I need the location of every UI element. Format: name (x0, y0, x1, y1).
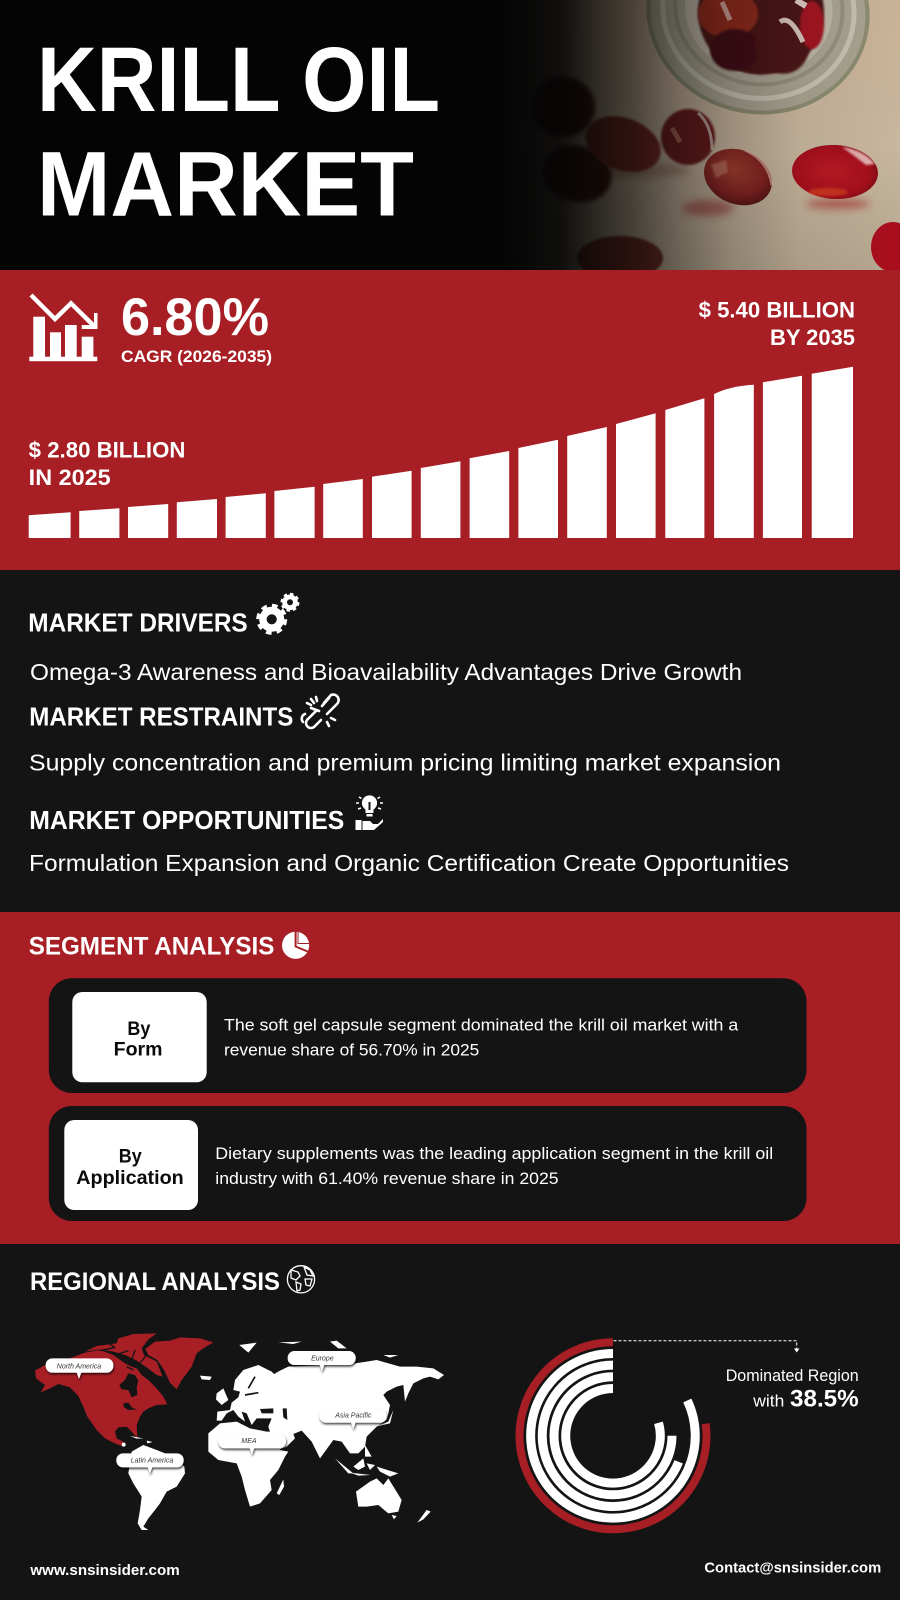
label: by application: Application (76, 1168, 184, 1189)
text: by application finding: Dietary supplements was the leading application segment in the krill oil (215, 1144, 773, 1163)
callout: dominated region share: with (752, 1392, 784, 1411)
CAGR value: 6.80% (121, 288, 269, 347)
label: by form (72, 992, 207, 1082)
text: by application finding: industry with 61.40% revenue share in 2025 (215, 1169, 559, 1188)
text: driver: Omega-3 Awareness and Bioavailability Advantages Drive Growth (30, 659, 742, 685)
panel: header (0, 0, 900, 280)
forecast value (699, 298, 855, 350)
panel: segment analysis (0, 912, 900, 1244)
label: by application (64, 1120, 198, 1210)
icon: lightbulb on hand (356, 795, 383, 830)
base value: IN 2025 (29, 465, 111, 490)
text: by form finding: The soft gel capsule segment dominated the krill oil market with a (224, 1016, 739, 1035)
CAGR label: CAGR (2026-2035) (121, 347, 272, 366)
panel: market size and CAGR (0, 270, 900, 570)
callout: MEA: MEA (241, 1438, 257, 1445)
callout: Europe (288, 1351, 356, 1372)
panel: regional analysis (0, 1244, 900, 1600)
text: opportunity: Formulation Expansion and Organic Certification Create Opportunities (29, 850, 789, 876)
card: by application (49, 1106, 807, 1221)
heading: market restraints: MARKET RESTRAINTS (29, 702, 293, 732)
callout: dominated region share: Dominated Region (726, 1366, 859, 1385)
heading: market drivers: MARKET DRIVERS (28, 608, 248, 638)
title: KRILL OIL (37, 29, 440, 131)
card: by form (49, 978, 807, 1093)
footer: website: www.snsinsider.com (29, 1562, 180, 1579)
callout: Asia Pacific (319, 1409, 387, 1429)
text: restraint: Supply concentration and premium pricing limiting market expansion (29, 750, 781, 776)
bar chart: market growth (29, 367, 853, 538)
heading: regional analysis: REGIONAL ANALYSIS (30, 1268, 280, 1296)
forecast value: BY 2035 (770, 325, 855, 350)
panel: drivers, restraints, opportunities (0, 570, 900, 912)
callout: dominated region share (726, 1366, 859, 1413)
icon: broken chain link (302, 695, 339, 728)
base value: $ 2.80 BILLION (29, 438, 185, 463)
world map (35, 1333, 444, 1530)
label: by form: Form (114, 1040, 162, 1061)
text: by application finding (215, 1144, 773, 1188)
map region: North America highlighted (35, 1333, 213, 1447)
icon: gears (258, 594, 298, 633)
callout: North America: North America (57, 1363, 101, 1370)
icon: globe (287, 1266, 315, 1293)
heading: market opportunities: MARKET OPPORTUNITIES (29, 805, 344, 835)
map region: rest of world (122, 1341, 444, 1530)
forecast value: $ 5.40 BILLION (699, 298, 855, 323)
callout: North America (46, 1358, 113, 1379)
icon: pie chart (282, 931, 310, 959)
callout: Asia Pacific: Asia Pacific (334, 1413, 372, 1420)
label: by form: By (127, 1019, 151, 1040)
callout: Latin America (116, 1453, 184, 1474)
footer: contact email: Contact@snsinsider.com (704, 1560, 881, 1577)
radial bar chart (519, 1342, 706, 1529)
title: MARKET (37, 134, 414, 236)
callout: Europe: Europe (311, 1355, 334, 1362)
base value (29, 438, 185, 490)
icon: chart with trend arrow (29, 295, 97, 361)
callout: Latin America: Latin America (131, 1458, 173, 1465)
heading: segment analysis: SEGMENT ANALYSIS (29, 932, 274, 960)
title (42, 47, 438, 216)
arrow: dashed leader to dominated region (614, 1341, 800, 1352)
callout: MEA (218, 1434, 286, 1455)
photo: krill oil capsules and glass jar (542, 0, 900, 270)
text: by form finding: revenue share of 56.70% in 2025 (224, 1041, 479, 1060)
label: by application: By (119, 1146, 142, 1167)
callout: dominated region share: 38.5% (790, 1386, 859, 1413)
text: by form finding (224, 1016, 739, 1060)
